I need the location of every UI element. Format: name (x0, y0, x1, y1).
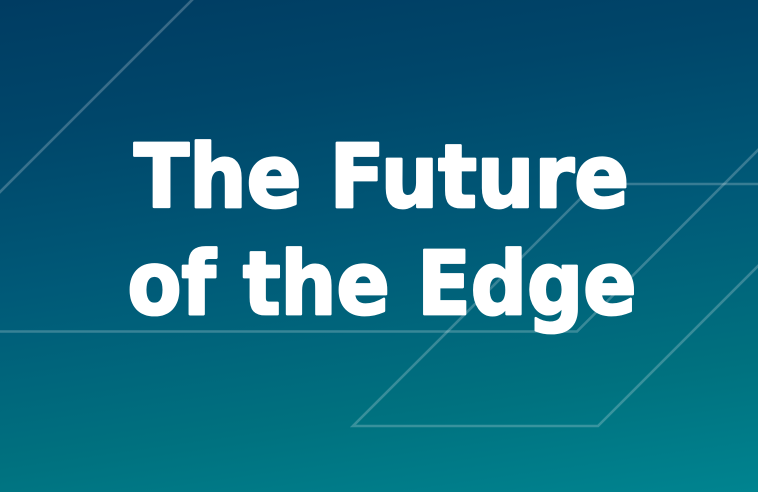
title: The Future (134, 126, 629, 228)
title: of the Edge (128, 233, 636, 335)
